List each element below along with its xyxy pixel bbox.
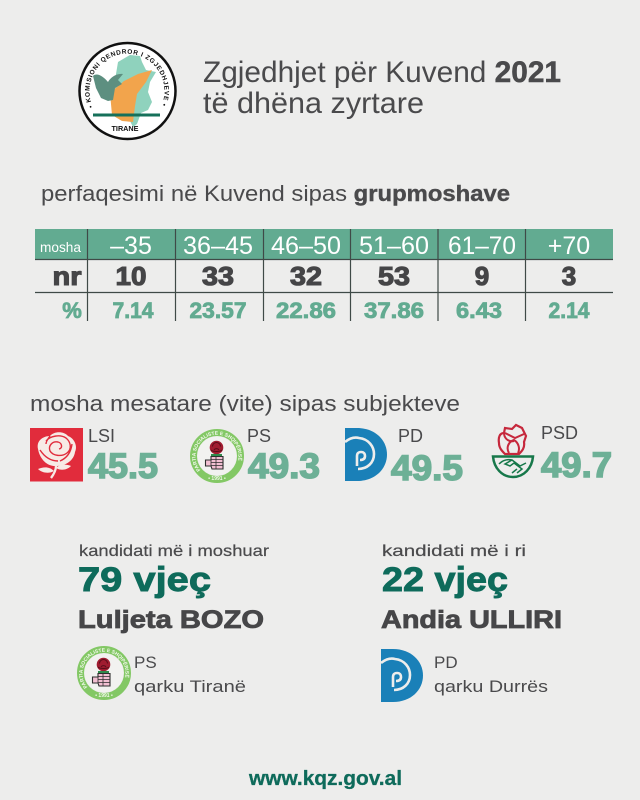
header labels: 46–50	[271, 232, 341, 260]
row: nr: 3	[562, 261, 576, 291]
row: nr	[52, 261, 576, 291]
value: 49.3	[248, 447, 320, 486]
row: percent: 7.14	[112, 298, 154, 323]
footer url: www.kqz.gov.al	[248, 768, 402, 790]
row: percent: %	[62, 298, 82, 323]
caption: kandidati më i ri	[382, 543, 526, 560]
row: percent: 37.86	[364, 298, 424, 323]
label: PD	[398, 426, 423, 446]
header labels: –35	[110, 232, 152, 260]
row: nr: 53	[378, 261, 410, 291]
header labels: mosha	[40, 240, 81, 255]
icon: PS emblem	[191, 431, 243, 482]
value: 49.5	[391, 449, 463, 488]
icon: PD emblem	[381, 649, 423, 702]
party: LSI	[30, 426, 158, 486]
heading: average age by party: mosha mesatare (vite) sipas subjekteve	[30, 391, 460, 416]
row: nr: 10	[116, 261, 146, 291]
row: percent	[62, 298, 590, 323]
row: nr: nr	[52, 261, 82, 291]
party and district	[134, 653, 246, 696]
value: 49.7	[541, 446, 612, 485]
party: PD	[345, 426, 463, 488]
title	[203, 56, 561, 120]
party: PSD	[493, 423, 612, 485]
party and district: qarku Durrës	[434, 677, 548, 696]
panel: oldest candidate	[78, 543, 270, 699]
icon: PSD rose and handshake	[493, 425, 533, 477]
label: LSI	[88, 426, 115, 446]
table grid lines	[35, 229, 613, 321]
party: PS	[191, 426, 320, 486]
title: të dhëna zyrtare	[203, 87, 424, 120]
name: Andia ULLIRI	[381, 606, 562, 634]
label: PSD	[541, 423, 578, 443]
name: Luljeta BOZO	[78, 606, 264, 634]
table header band	[35, 229, 613, 259]
icon: PD emblem	[345, 428, 387, 481]
header labels: +70	[548, 232, 590, 260]
heading: representation by age group: perfaqesimi në Kuvend sipas grupmoshave	[41, 181, 510, 206]
party and district: PS	[134, 653, 157, 672]
table: age groups	[35, 229, 613, 323]
header labels: 36–45	[183, 232, 253, 260]
value: 45.5	[88, 447, 158, 486]
logo: KQZ seal	[78, 42, 177, 140]
age: 22 vjeç	[382, 561, 508, 599]
icon: PS emblem	[78, 648, 130, 699]
party and district	[434, 653, 548, 696]
icon: LSI rose	[30, 428, 83, 482]
label: PS	[247, 426, 271, 446]
row: percent: 23.57	[190, 298, 246, 323]
party and district: PD	[434, 653, 458, 672]
party and district: qarku Tiranë	[134, 677, 246, 696]
row: nr: 9	[475, 261, 489, 291]
caption: kandidati më i moshuar	[79, 543, 270, 560]
row: percent: 2.14	[548, 298, 590, 323]
logo: KQZ seal: • KOMISIONI QENDROR I ZGJEDHJEVE •	[84, 49, 170, 108]
row: percent: 6.43	[456, 298, 502, 323]
panel: youngest candidate	[381, 543, 562, 702]
row: nr: 32	[290, 261, 322, 291]
header labels: 51–60	[359, 232, 429, 260]
row: percent: 22.86	[276, 298, 336, 323]
age: 79 vjeç	[78, 561, 211, 599]
row: nr: 33	[202, 261, 234, 291]
header labels	[40, 232, 590, 260]
title: Zgjedhjet për Kuvend 2021	[203, 56, 561, 89]
logo: KQZ seal: TIRANE	[112, 124, 138, 133]
header labels: 61–70	[448, 232, 516, 260]
